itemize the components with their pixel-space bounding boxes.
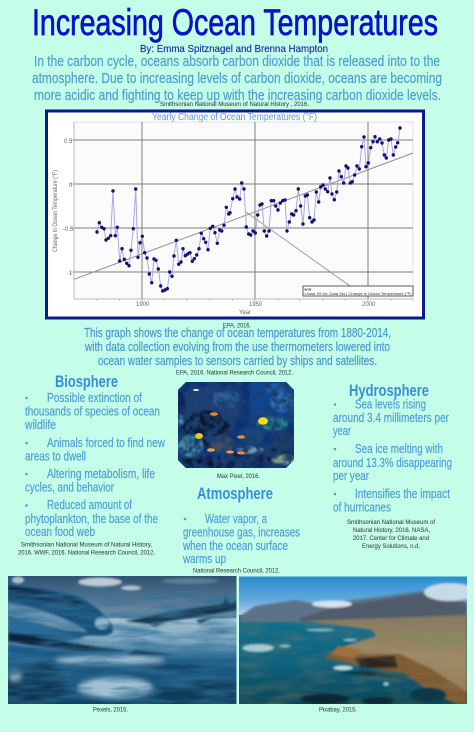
bullet list: biosphere: ocean food web [25, 525, 95, 539]
citation: hydrosphere [347, 519, 435, 550]
bullet list: atmosphere: when the ocean surface [182, 539, 288, 553]
heading: atmosphere: Atmosphere [197, 485, 273, 503]
reef fish [193, 389, 268, 454]
chart legend box: a/ a/ [304, 288, 311, 292]
bullet list: biosphere: cycles, and behavior [25, 480, 114, 494]
citation: biosphere: Smithsonian National Museum of Natural History, [21, 542, 152, 548]
x axis tick labels [136, 302, 376, 308]
intro text block [32, 53, 442, 104]
y axis title: Change in Ocean Temperature (°F) [53, 170, 59, 252]
bullet list: biosphere: Animals forced to find new [47, 436, 166, 450]
bullet list: hydrosphere: Sea levels rising [355, 398, 426, 412]
graph description text [84, 325, 391, 368]
y axis tick labels: 0.5 [64, 139, 73, 145]
panel: hydrosphere [333, 382, 452, 550]
citation: chart: EPA, 2016. [223, 322, 251, 330]
y axis tick labels: -0.5 [63, 227, 74, 233]
bullet list: biosphere: wildlife [24, 418, 56, 432]
citation: hydrosphere: Smithsonian National Museum of [347, 519, 435, 526]
chart title: Yearly Change of Ocean Temperatures (°F) [152, 112, 317, 123]
bullet list: biosphere: Possible extinction of [47, 391, 142, 405]
chart frame [46, 111, 424, 318]
citation: reef photo: Max Pixel, 2016. [217, 473, 260, 480]
data series line [97, 128, 400, 291]
citation: graph description: EPA, 2016. National Research Council, 2012. [176, 370, 293, 376]
y axis tick labels [63, 139, 74, 277]
bullet list: hydrosphere [333, 398, 452, 514]
citation: biosphere [18, 542, 155, 556]
citation: hydrosphere: 2017. Center for Climate and [353, 535, 429, 542]
photo: breaking wave [3, 576, 244, 704]
x axis tick labels: 1950 [249, 302, 263, 308]
photo: coral reef [175, 382, 296, 471]
bullet list: hydrosphere: Intensifies the impact [355, 487, 450, 501]
citation: hydrosphere: Energy Solutions, n.d. [362, 543, 420, 550]
panel: atmosphere [182, 485, 300, 574]
bullet list: biosphere: thousands of species of ocean [25, 404, 160, 418]
citation: coast photo: Pixabay, 2015. [319, 706, 357, 714]
chart legend box: Linear Fit for: Data Set | Change in Ocean Temperature (°F) [304, 291, 412, 296]
bullet list: biosphere [24, 391, 166, 539]
panel: line chart of yearly ocean temperature change [46, 111, 424, 318]
bullet list: biosphere: Altering metabolism, life [47, 467, 155, 481]
bullet list: atmosphere: Water vapor, a [205, 512, 267, 526]
heading: biosphere: Biosphere [55, 373, 118, 391]
bullet list: hydrosphere: per year [333, 469, 369, 483]
x axis title: Year [239, 310, 251, 316]
byline: By: Emma Spitznagel and Brenna Hampton [140, 43, 328, 55]
bullet list: hydrosphere: around 3.4 millimeters per [333, 411, 449, 425]
citation: biosphere: 2016. WWF, 2016. National Research Council, 2012. [18, 550, 155, 556]
graph description text: ocean water samples to sensors carried by ships and satellites. [98, 353, 377, 368]
panel: biosphere [18, 373, 166, 556]
bullet list: atmosphere: warms up [182, 552, 226, 566]
x axis tick labels: 1900 [136, 302, 150, 308]
bullet list: atmosphere [182, 512, 300, 566]
x axis tick labels: 2000 [362, 302, 376, 308]
chart legend box [303, 286, 413, 296]
citation: wave photo: Pexels, 2015. [93, 706, 128, 714]
y axis tick labels: -1 [67, 271, 73, 277]
bullet list: biosphere: phytoplankton, the base of the [25, 512, 158, 526]
data series markers [97, 128, 400, 291]
citation: atmosphere: National Research Council, 2012. [193, 568, 280, 574]
citation: intro: Smithsonian National Museum of Natural History , 2016. [160, 101, 309, 108]
bullet list: hydrosphere: of hurricanes [333, 500, 391, 514]
legend leader line [246, 212, 350, 286]
heading: hydrosphere: Hydrosphere [349, 382, 429, 400]
bullet list: hydrosphere: Sea ice melting with [355, 442, 443, 456]
trend line [74, 153, 413, 279]
bullet list: biosphere: Reduced amount of [47, 498, 132, 512]
bullet list: atmosphere: greenhouse gas, increases [183, 526, 300, 540]
y axis tick labels: 0 [69, 183, 73, 189]
graph description text: with data collection evolving from the use thermometers lowered into [84, 339, 390, 354]
photo: coastal cliffs [239, 576, 474, 705]
citation: hydrosphere: Natural History, 2016. NASA, [353, 527, 430, 534]
bullet list: hydrosphere: year [333, 424, 351, 438]
bullet list: biosphere: areas to dwell [25, 450, 86, 464]
